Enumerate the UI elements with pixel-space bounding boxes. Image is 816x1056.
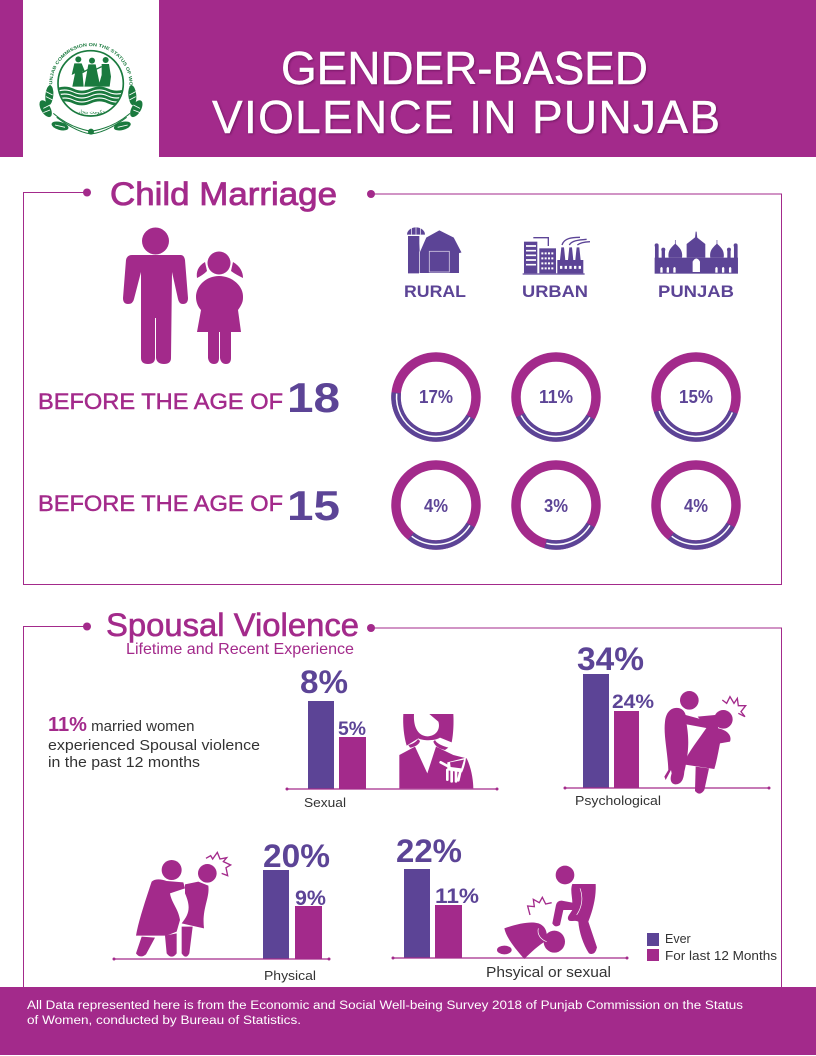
chart: psychological: Psychological	[575, 793, 661, 808]
icon: punjab mosque	[655, 232, 738, 274]
label: before the age of 18: BEFORE THE AGE OF	[38, 389, 283, 414]
legend: For last 12 Months	[665, 949, 777, 963]
logo panel	[23, 0, 159, 157]
three figures	[72, 56, 111, 87]
chart: psychological	[564, 641, 770, 808]
title	[212, 42, 720, 143]
chart: physical or sexual: 11%	[435, 885, 479, 908]
icon: commission logo	[40, 43, 142, 135]
panel frame	[24, 626, 782, 988]
donut: rural 15 4%	[381, 450, 491, 560]
footer: All Data represented here is from the Economic and Social Well-being Survey 2018 of Punjab Commission on the Status	[27, 1000, 743, 1012]
legend	[647, 932, 777, 963]
donut: punjab 15 4%: 4%	[684, 496, 708, 516]
waves	[55, 88, 127, 104]
heading: child marriage: Child Marriage	[110, 176, 337, 212]
icon: urban factory	[523, 237, 590, 274]
text block: 11% married women: experienced Spousal violence	[48, 737, 260, 754]
chart: physical or sexual: 22%	[396, 833, 462, 869]
chart: psychological: 34%	[577, 641, 644, 677]
donut: punjab 15 4%	[641, 450, 751, 560]
icon: commission logo: PUNJAB COMMISSION ON THE STATUS OF WOMEN	[49, 43, 133, 88]
chart: physical	[112, 838, 330, 983]
label: urban: URBAN	[522, 282, 588, 301]
donut: punjab 18 15%	[644, 345, 748, 449]
donut: urban 18 11%: 11%	[539, 387, 573, 407]
panel: child marriage	[24, 176, 782, 584]
title: GENDER-BASED	[281, 42, 648, 94]
label: before the age of 15: BEFORE THE AGE OF	[38, 491, 283, 516]
subheading: Lifetime and Recent Experience	[126, 641, 354, 658]
heading: spousal violence: Spousal Violence	[106, 607, 359, 643]
icon: physical violence figures	[136, 852, 231, 957]
icon: commission logo: حکومت پنجاب	[76, 109, 106, 115]
text block: 11% married women: 11% married women	[48, 714, 194, 736]
donut: punjab 18 15%: 15%	[679, 387, 713, 407]
label: before the age of 15: 15	[287, 482, 340, 529]
icon: rural barn	[407, 227, 462, 273]
label: before the age of 15	[38, 482, 340, 529]
chart: physical: 9%	[295, 887, 326, 910]
text block: 11% married women: in the past 12 months	[48, 754, 200, 771]
legend: Ever	[665, 932, 691, 946]
icon: man and girl	[123, 228, 243, 364]
donut: rural 18 17%: 17%	[419, 387, 453, 407]
label: before the age of 18	[38, 374, 340, 421]
panel frame	[24, 192, 782, 584]
label: punjab: PUNJAB	[658, 282, 734, 301]
wheat sprigs	[37, 85, 145, 135]
chart: physical or sexual: Phsyical or sexual	[486, 964, 611, 981]
chart: sexual: Sexual	[304, 795, 346, 810]
donut: urban 15 3%	[501, 450, 611, 560]
panel: spousal violence	[24, 607, 782, 988]
icon: psychological violence figures	[664, 691, 746, 794]
label: rural: RURAL	[404, 282, 466, 301]
icon: sexual harassment figure	[399, 714, 473, 788]
chart: psychological: 24%	[612, 692, 654, 713]
donut: urban 15 3%: 3%	[544, 496, 568, 516]
donut: urban 18 11%	[501, 342, 611, 452]
chart: sexual: 5%	[338, 719, 366, 740]
icon: physical or sexual violence figures	[497, 866, 597, 959]
label: before the age of 18: 18	[287, 374, 340, 421]
header banner	[0, 0, 816, 157]
text block: 11% married women	[48, 714, 260, 771]
footer: of Women, conducted by Bureau of Statistics.	[27, 1015, 301, 1027]
title: VIOLENCE IN PUNJAB	[212, 91, 720, 143]
chart: sexual	[286, 664, 498, 810]
chart: physical: 20%	[263, 838, 330, 874]
chart: physical: Physical	[264, 968, 316, 983]
donut: rural 18 17%	[381, 342, 491, 452]
chart: sexual: 8%	[300, 664, 348, 700]
footer	[0, 987, 816, 1055]
chart: physical or sexual	[392, 833, 628, 981]
donut: rural 15 4%: 4%	[424, 496, 448, 516]
